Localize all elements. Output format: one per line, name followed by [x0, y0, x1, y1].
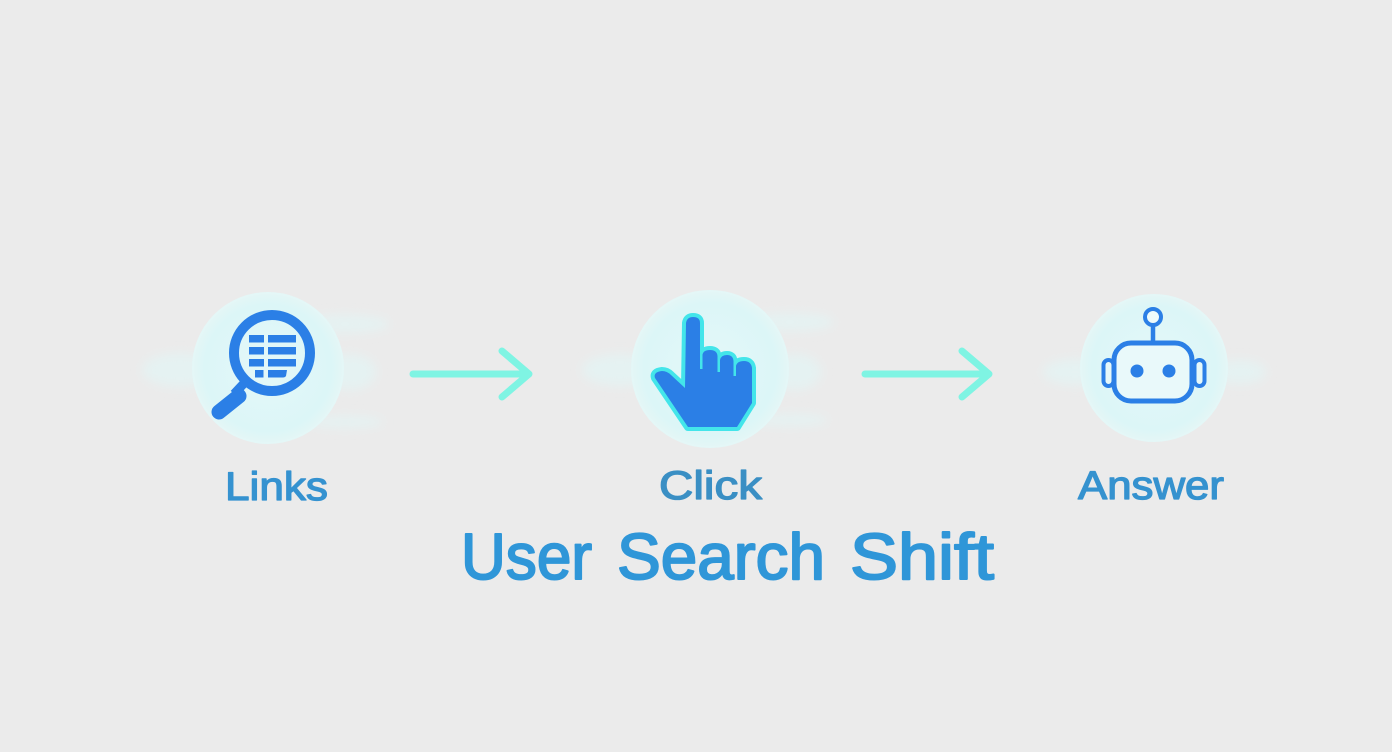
label: Click: Click — [659, 464, 763, 508]
icon: magnifying glass over list — [219, 315, 310, 412]
icon: robot — [1104, 309, 1204, 401]
label: Links: Links — [225, 465, 328, 509]
glow behind answer icon — [1043, 359, 1266, 385]
label: Answer: Answer — [1078, 464, 1224, 508]
title: Search — [617, 520, 825, 593]
step: Links — [142, 293, 389, 509]
icon: pointing hand — [655, 317, 752, 427]
step: Click — [582, 291, 834, 508]
glow behind click icon — [582, 313, 834, 426]
step: Answer — [1043, 295, 1266, 508]
arrow: links to click — [413, 351, 529, 397]
disc: links — [193, 293, 343, 443]
arrow: click to answer — [865, 351, 989, 397]
glow behind links icon — [142, 315, 389, 428]
title: Shift — [850, 520, 994, 593]
disc: answer — [1081, 295, 1227, 441]
title: User — [461, 520, 592, 593]
disc: click — [632, 291, 788, 447]
